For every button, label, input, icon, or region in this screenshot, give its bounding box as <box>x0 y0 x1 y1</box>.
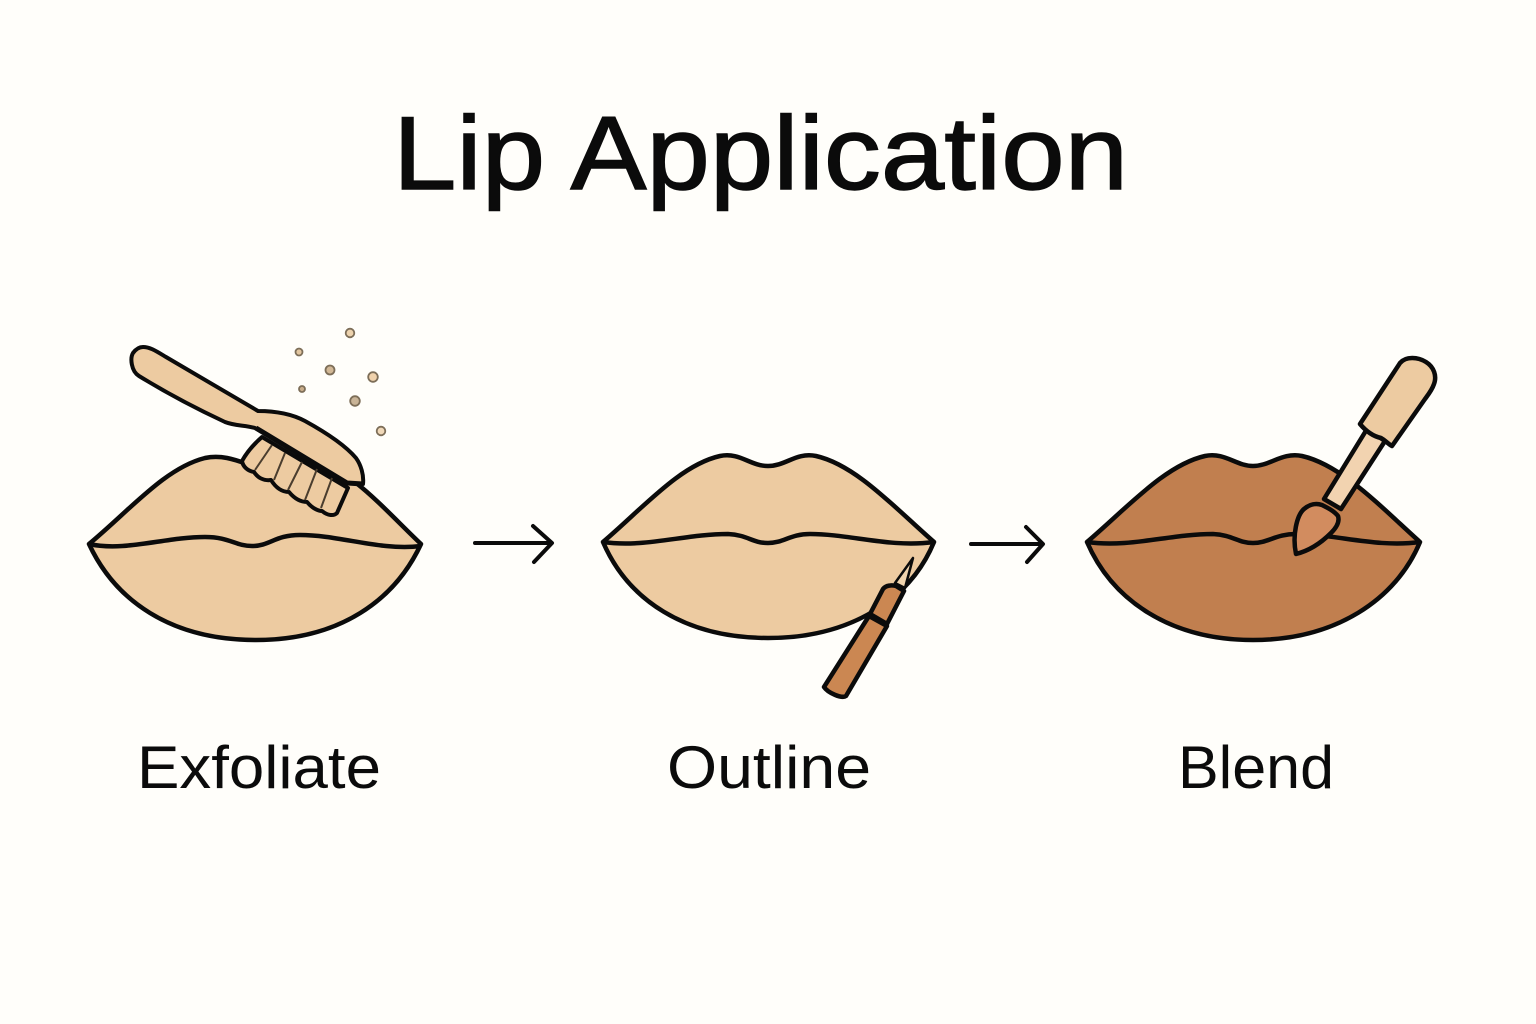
step 1: exfoliate <box>89 329 421 640</box>
icon: particles <box>296 329 385 435</box>
brush bristles <box>242 437 348 515</box>
icon: lip liner pencil <box>824 558 913 697</box>
lips: blend <box>1087 455 1420 640</box>
label: exfoliate: Exfoliate <box>137 734 381 801</box>
icon: brush <box>131 347 363 515</box>
lips: exfoliate <box>89 457 421 640</box>
brush handle and head <box>131 347 363 484</box>
step 3: blend <box>1087 358 1435 640</box>
icon: blending brush <box>1295 358 1435 554</box>
arrow 2 <box>971 527 1043 562</box>
label: blend: Blend <box>1178 734 1334 801</box>
label: outline: Outline <box>667 734 871 801</box>
brush head underside <box>256 428 363 484</box>
lips: outline <box>603 455 934 638</box>
arrow 1 <box>475 526 552 562</box>
step 2: outline <box>603 455 934 697</box>
title: Lip Application <box>393 96 1128 212</box>
brush bristle separators <box>255 445 332 508</box>
